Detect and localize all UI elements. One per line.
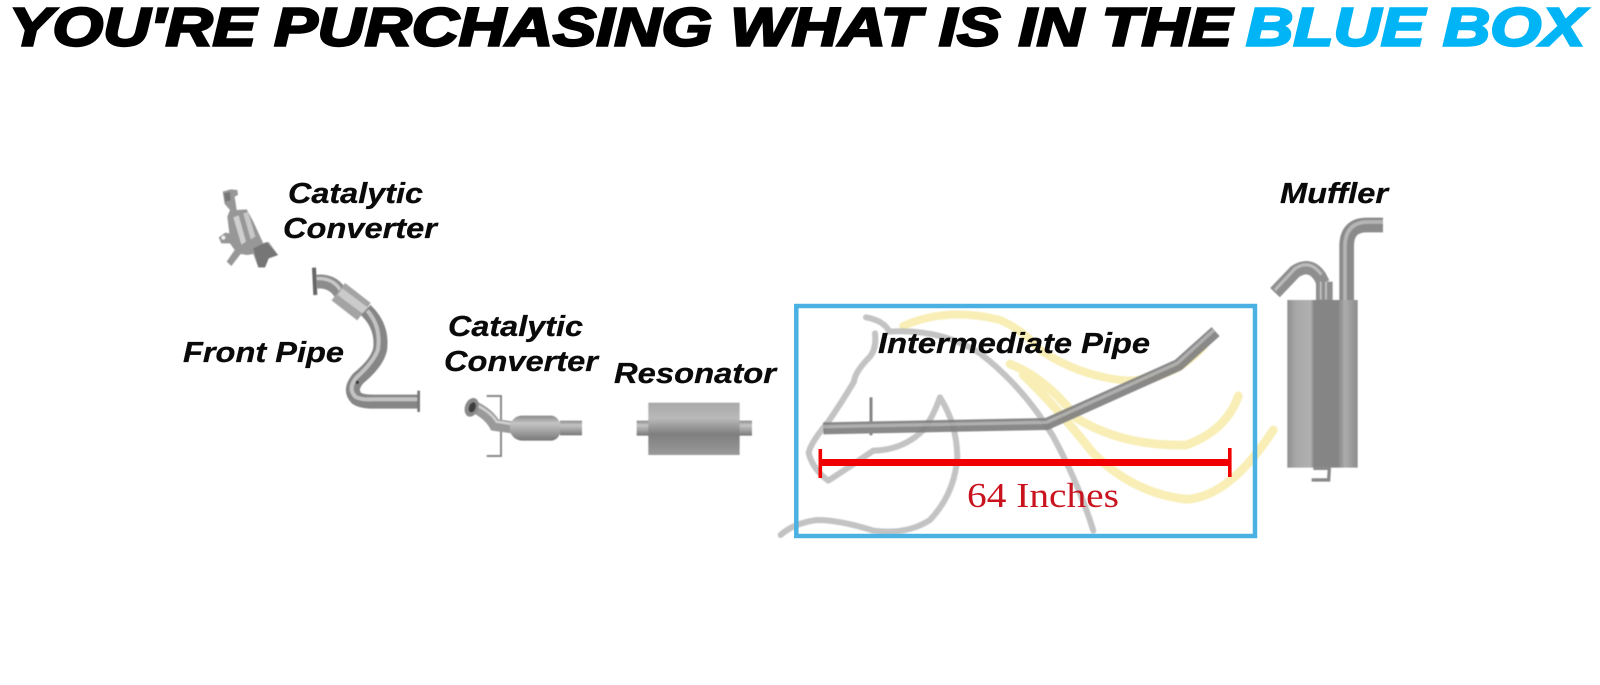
- icon: muffler: [1275, 222, 1383, 480]
- label: 64 inches: 64 Inches: [967, 476, 1119, 515]
- label: muffler: Muffler: [1280, 178, 1390, 210]
- label: resonator: Resonator: [614, 358, 778, 390]
- label: front pipe: Front Pipe: [183, 337, 344, 369]
- icon: lower catalytic converter: [462, 396, 582, 456]
- label: upper catalytic converter: [283, 178, 439, 245]
- icon: intermediate pipe: [823, 330, 1216, 435]
- icon: front pipe: [314, 268, 419, 412]
- icon: upper catalytic converter: [219, 189, 278, 267]
- label: lower catalytic converter: Converter: [444, 346, 600, 378]
- blue box: [796, 306, 1255, 536]
- label: upper catalytic converter: Converter: [283, 213, 439, 245]
- horse watermark: [781, 315, 1273, 535]
- dimension bar: 64 inches: [818, 448, 1232, 478]
- icon: resonator: [637, 403, 752, 455]
- label: intermediate pipe: Intermediate Pipe: [878, 328, 1150, 360]
- label: lower catalytic converter: Catalytic: [448, 311, 583, 343]
- label: upper catalytic converter: Catalytic: [288, 178, 423, 210]
- label: lower catalytic converter: [444, 311, 600, 378]
- title: [9, 0, 1589, 58]
